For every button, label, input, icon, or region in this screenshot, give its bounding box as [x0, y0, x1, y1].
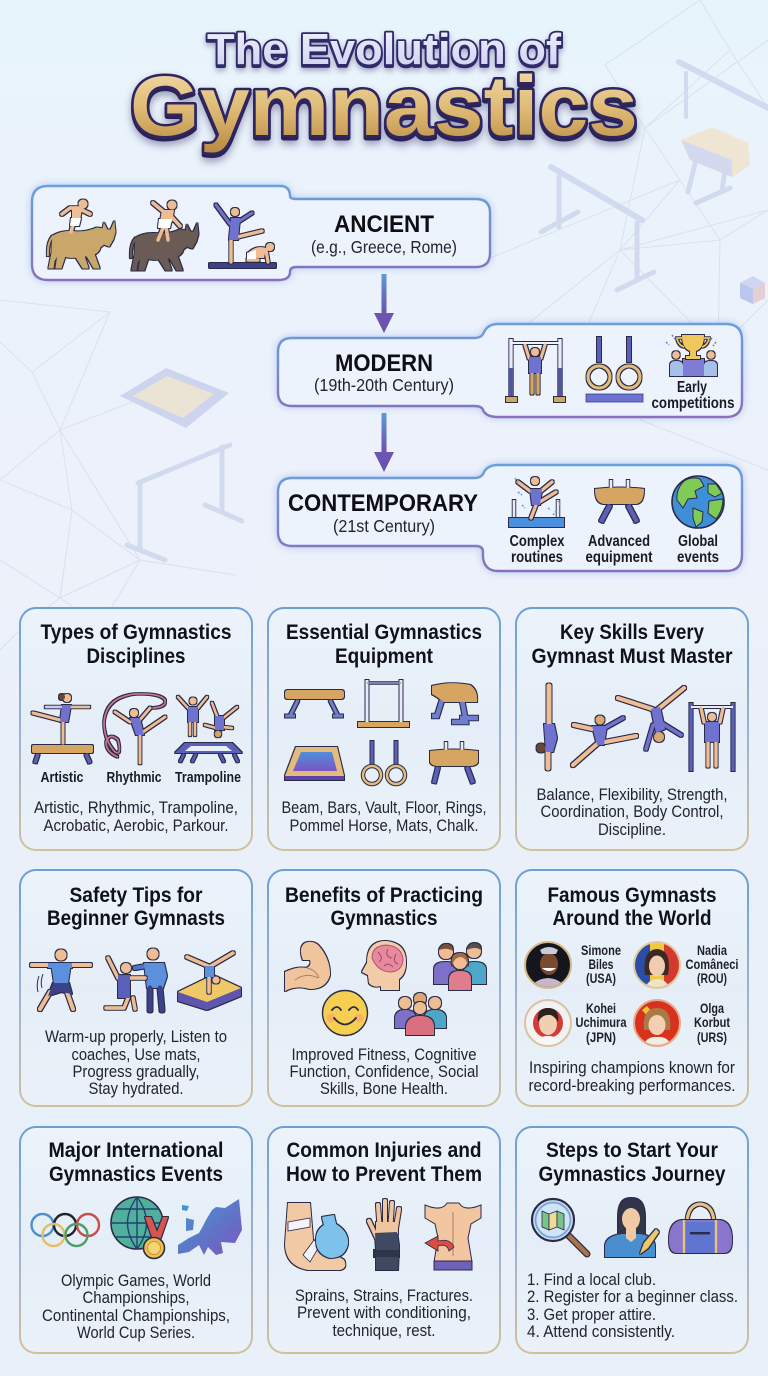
heading [47, 884, 225, 930]
label: Early competitions: Early [677, 379, 707, 396]
icon: head with brain [362, 941, 406, 990]
label: Advanced equipment: Advanced [588, 533, 650, 550]
body text: Function, Confidence, Social [290, 1062, 478, 1081]
icon: acrobat leaping over dark bull [131, 200, 198, 270]
icon: artistic gymnast on beam [32, 694, 93, 763]
body text: numbered steps: 4. Attend consistently. [527, 1322, 675, 1341]
icon: bandaged ankle with ice pack [285, 1203, 348, 1270]
icon: globe [672, 476, 724, 528]
icon: cartwheel [618, 688, 684, 749]
icon: acrobat standing on tan bull [48, 200, 115, 268]
panel: benefits [268, 870, 500, 1106]
body text: numbered steps: 2. Register for a beginner class. [527, 1287, 738, 1306]
label: Nadia Comaneci: (ROU) [697, 971, 727, 986]
heading [40, 621, 232, 668]
body text: Artistic, Rhythmic, Trampoline, [34, 798, 238, 817]
heading: Key Skills Every [560, 621, 704, 644]
labels: discipline names: Rhythmic [106, 770, 162, 786]
heading: Gymnast Must Master [532, 645, 732, 668]
body text: Skills, Bone Health. [320, 1079, 448, 1098]
icon: vault [432, 683, 478, 722]
heading [548, 884, 716, 930]
heading: Major International [48, 1139, 224, 1162]
label: Olga Korbut: Olga [700, 1001, 724, 1016]
icon: coach spotting kneeling gymnast [106, 948, 167, 1010]
panel: famous gymnasts [516, 870, 748, 1106]
body text: Discipline. [598, 820, 666, 839]
body text: Pommel Horse, Mats, Chalk. [290, 816, 478, 835]
body text: Beam, Bars, Vault, Floor, Rings, [282, 798, 486, 817]
panel: types of gymnastics disciplines [20, 608, 252, 850]
heading: How to Prevent Them [286, 1163, 482, 1186]
label: Kohei Uchimura: Kohei [586, 1001, 616, 1016]
icon: handstand on mat [178, 953, 241, 1010]
body text: Championships, [82, 1288, 190, 1307]
heading: Gymnastics [330, 907, 438, 930]
heading [286, 1139, 482, 1186]
heading: Famous Gymnasts [548, 884, 716, 907]
body text: numbered steps [527, 1270, 738, 1341]
label: Olga Korbut [694, 1001, 730, 1045]
icon: handstand [536, 686, 557, 768]
icon: olympic rings [32, 1214, 99, 1246]
icon: high bar with gymnast [506, 339, 565, 402]
background equipment: vault [681, 127, 750, 203]
body text: Balance, Flexibility, Strength, [536, 785, 728, 804]
label: Complex routines: routines [511, 549, 563, 566]
icon: floor mat [285, 747, 344, 780]
icon: smiley [322, 990, 368, 1036]
label: Nadia Comaneci: Nadia [697, 943, 727, 958]
body text [290, 1045, 478, 1098]
label: Global events: events [677, 549, 719, 566]
arrow: modern to contemporary [374, 413, 394, 472]
heading: Equipment [335, 645, 433, 668]
icon: rings [363, 741, 405, 784]
label: Advanced equipment [586, 533, 652, 566]
body text [42, 1271, 230, 1342]
title [130, 25, 638, 153]
portrait: Olga Korbut [634, 1000, 680, 1048]
heading: ANCIENT: ANCIENT [334, 211, 434, 238]
body text: Prevent with conditioning, [297, 1303, 471, 1322]
label: Complex routines [510, 533, 565, 566]
label: Nadia Comaneci [686, 943, 738, 986]
icon: gym bag [669, 1204, 732, 1253]
portrait: Nadia Comaneci [634, 942, 680, 990]
body text: Improved Fitness, Cognitive [292, 1045, 476, 1064]
icon: split leap [573, 716, 636, 765]
body text: World Cup Series. [77, 1323, 195, 1342]
body text: Warm-up properly, Listen to [45, 1027, 227, 1046]
panel: steps to start [516, 1127, 748, 1353]
icon: map of Europe [178, 1199, 242, 1255]
label: Early competitions [652, 379, 734, 412]
panel: common injuries [268, 1127, 500, 1353]
label: Kohei Uchimura: (JPN) [586, 1030, 616, 1045]
label: Global events: Global [678, 533, 718, 550]
heading: MODERN: MODERN [335, 350, 433, 377]
body text [282, 798, 486, 835]
title line: The Evolution of: The Evolution of [207, 25, 561, 74]
body text: Continental Championships, [42, 1306, 230, 1325]
portrait: Simone Biles [525, 942, 571, 990]
label: Complex routines: Complex [510, 533, 565, 550]
heading: Steps to Start Your [546, 1139, 718, 1162]
title line: Gymnastics: Gymnastics [130, 59, 638, 153]
heading: Essential Gymnastics [286, 621, 482, 644]
subheading: Contemporary period: (21st Century) [333, 516, 435, 536]
subheading: Modern period: (19th-20th Century) [314, 375, 454, 395]
label: Early competitions: competitions [652, 395, 734, 412]
icon: complex routine gymnast [509, 477, 564, 527]
heading: Safety Tips for [70, 884, 202, 907]
body text: numbered steps: 3. Get proper attire. [527, 1305, 656, 1324]
subheading: Ancient period: (e.g., Greece, Rome) [311, 237, 457, 257]
body text: record-breaking performances. [528, 1076, 736, 1095]
label: Global events [677, 533, 719, 566]
heading: Types of Gymnastics [40, 621, 232, 644]
heading [538, 1139, 726, 1186]
icon: rhythmic gymnast with ribbon [104, 694, 165, 763]
icon: pommel horse [595, 480, 644, 522]
label: Olga Korbut: Korbut [694, 1015, 730, 1030]
label: Simone Biles: (USA) [586, 971, 616, 986]
background equipment: cube [740, 276, 765, 304]
heading [48, 1139, 224, 1186]
body text: coaches, Use mats, [72, 1045, 200, 1064]
portrait: Kohei Uchimura [525, 1000, 571, 1048]
body text: Sprains, Strains, Fractures. [295, 1286, 473, 1305]
icon: family [434, 943, 486, 990]
label: Kohei Uchimura: Uchimura [576, 1015, 627, 1030]
icon: gymnast balancing on mat [209, 205, 276, 268]
icon: balance beam [285, 690, 344, 716]
labels: discipline names: Trampoline [175, 770, 241, 786]
background equipment: high bars top right [541, 62, 768, 290]
body text [45, 1027, 227, 1098]
label: Nadia Comaneci: Comâneci [686, 957, 738, 972]
label: Simone Biles: Biles [588, 957, 614, 972]
heading [285, 884, 483, 930]
icon: person registering [605, 1198, 659, 1257]
labels: discipline names: Artistic [40, 770, 84, 786]
heading: Disciplines [86, 645, 186, 668]
icon: gymnastic rings and mat [586, 337, 643, 402]
icon: pull-up on bar [691, 703, 733, 771]
body text [295, 1286, 473, 1340]
panel: major international events [20, 1127, 252, 1353]
heading: Around the World [552, 907, 712, 930]
icon: lower back [425, 1203, 481, 1270]
body text: Inspiring champions known for [529, 1058, 735, 1077]
panel: modern era [278, 324, 742, 417]
body text: Progress gradually, [72, 1062, 200, 1081]
heading: Benefits of Practicing [285, 884, 483, 907]
body text: numbered steps: 1. Find a local club. [527, 1270, 656, 1289]
label: Olga Korbut: (URS) [697, 1030, 727, 1045]
background equipment: parallel bar left [127, 445, 242, 560]
body text [528, 1058, 736, 1095]
body text [536, 785, 728, 839]
icon: social group [395, 993, 446, 1035]
label: Kohei Uchimura [576, 1001, 627, 1045]
panel: key skills [516, 608, 748, 850]
labels: discipline names [40, 770, 241, 786]
label: Simone Biles [581, 943, 621, 986]
background equipment: mat tray [120, 368, 229, 428]
body text: Stay hydrated. [88, 1079, 184, 1098]
heading: Gymnastics Journey [538, 1163, 726, 1186]
heading: Beginner Gymnasts [47, 907, 225, 930]
label: Advanced equipment: equipment [586, 549, 652, 566]
heading: CONTEMPORARY: CONTEMPORARY [288, 490, 478, 517]
icon: trophy and early competitors [666, 335, 717, 376]
panel: contemporary era [278, 465, 742, 571]
icon: magnifier over map [532, 1199, 587, 1254]
icon: warm-up [32, 950, 90, 1009]
icon: bars [358, 680, 409, 727]
body text [34, 798, 238, 835]
icon: wrist brace [369, 1201, 399, 1270]
panel: essential gymnastics equipment [268, 608, 500, 850]
panel: safety tips [20, 870, 252, 1106]
body text: Acrobatic, Aerobic, Parkour. [44, 816, 228, 835]
heading [286, 621, 482, 668]
body text: Olympic Games, World [61, 1271, 211, 1290]
icon: globe with medal [111, 1197, 168, 1258]
icon: trampoline gymnasts [175, 697, 242, 762]
heading: Gymnastics Events [49, 1163, 223, 1186]
icon: flexed arm [285, 942, 330, 991]
body text: Coordination, Body Control, [540, 802, 724, 821]
heading [532, 621, 732, 668]
label: Simone Biles: Simone [581, 943, 621, 958]
heading: Common Injuries and [286, 1139, 482, 1162]
panel: ancient era [32, 186, 490, 280]
body text: technique, rest. [332, 1321, 436, 1340]
icon: pommel horse [430, 742, 478, 783]
arrow: ancient to modern [374, 274, 394, 333]
